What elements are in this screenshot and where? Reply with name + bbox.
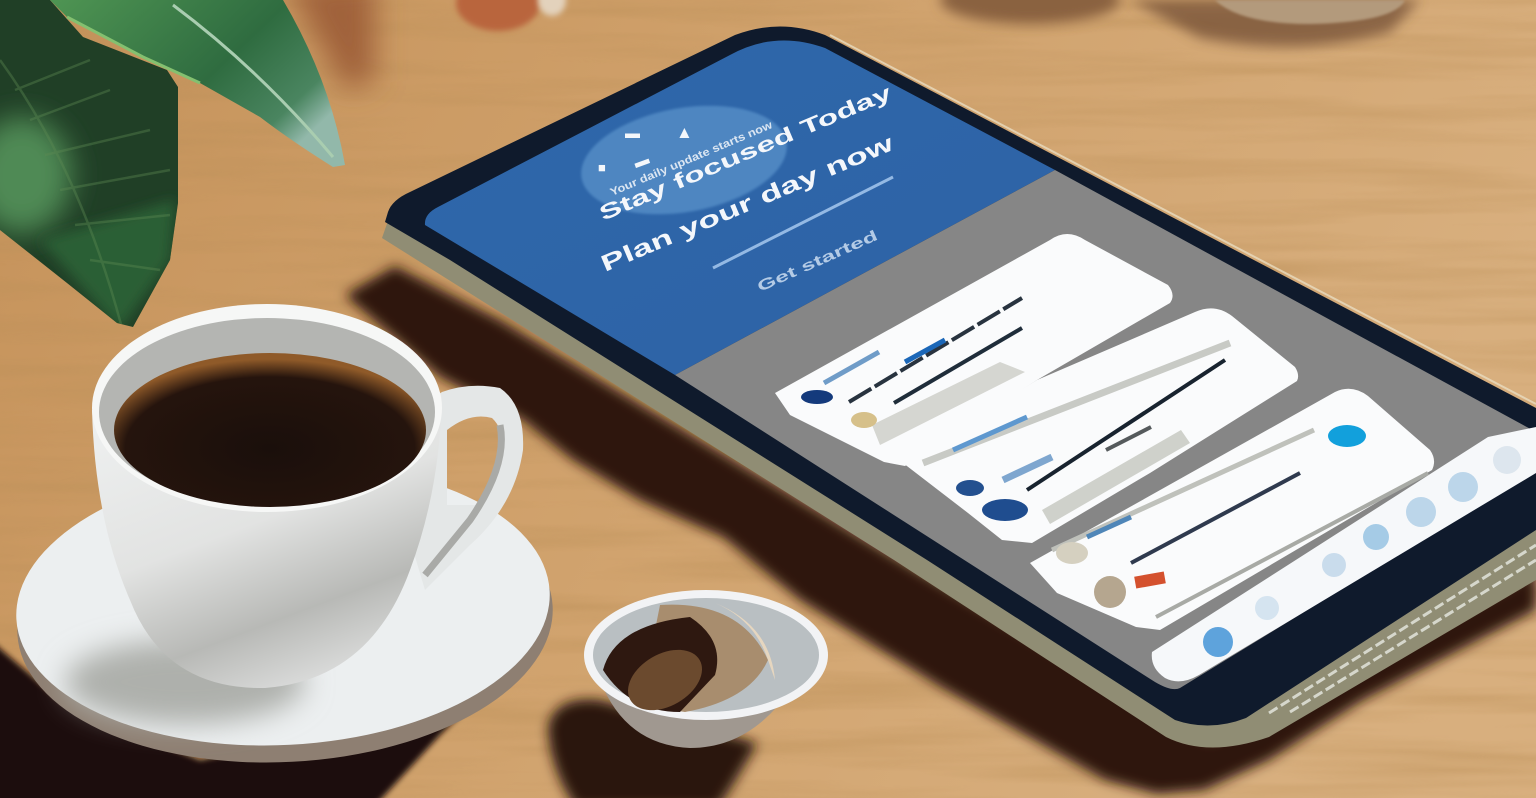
header text: ■ — [598, 160, 606, 175]
card 2 — [903, 308, 1298, 543]
header divider — [713, 177, 893, 268]
header text: ▬ — [632, 151, 651, 172]
header text: Stay focused Today — [596, 81, 895, 226]
saucer — [9, 451, 560, 776]
leaf: lower — [0, 0, 180, 330]
smartphone — [382, 26, 1536, 748]
header text: ▬ — [625, 125, 640, 142]
background objects at top edge — [285, 0, 1420, 90]
header text: Plan your day now — [597, 130, 897, 277]
handle — [410, 386, 523, 590]
leaf: upper — [50, 0, 345, 167]
small bowl — [584, 590, 828, 748]
edge highlights — [1269, 545, 1536, 713]
bowl contents — [640, 605, 768, 712]
header text: Get started — [755, 227, 880, 296]
bottom navigation bar — [1152, 427, 1536, 681]
coffee cup and saucer — [9, 304, 560, 776]
header text: Your daily update starts now — [608, 119, 775, 199]
phone edge — [382, 215, 1536, 748]
leaves — [0, 0, 345, 330]
header text — [596, 81, 897, 296]
screen: gray body — [675, 170, 1536, 689]
cup body — [92, 395, 442, 688]
card 1 — [775, 234, 1173, 466]
header text: ▲ — [676, 123, 693, 142]
shadows on table — [0, 266, 1536, 798]
upper edge highlight — [830, 35, 1536, 404]
phone body — [385, 26, 1536, 726]
header circle — [573, 91, 795, 229]
card 3 — [1030, 389, 1434, 630]
cup rim — [92, 304, 442, 512]
cup inside — [99, 318, 435, 506]
coffee — [114, 353, 426, 507]
screen: blue header — [425, 40, 1055, 375]
